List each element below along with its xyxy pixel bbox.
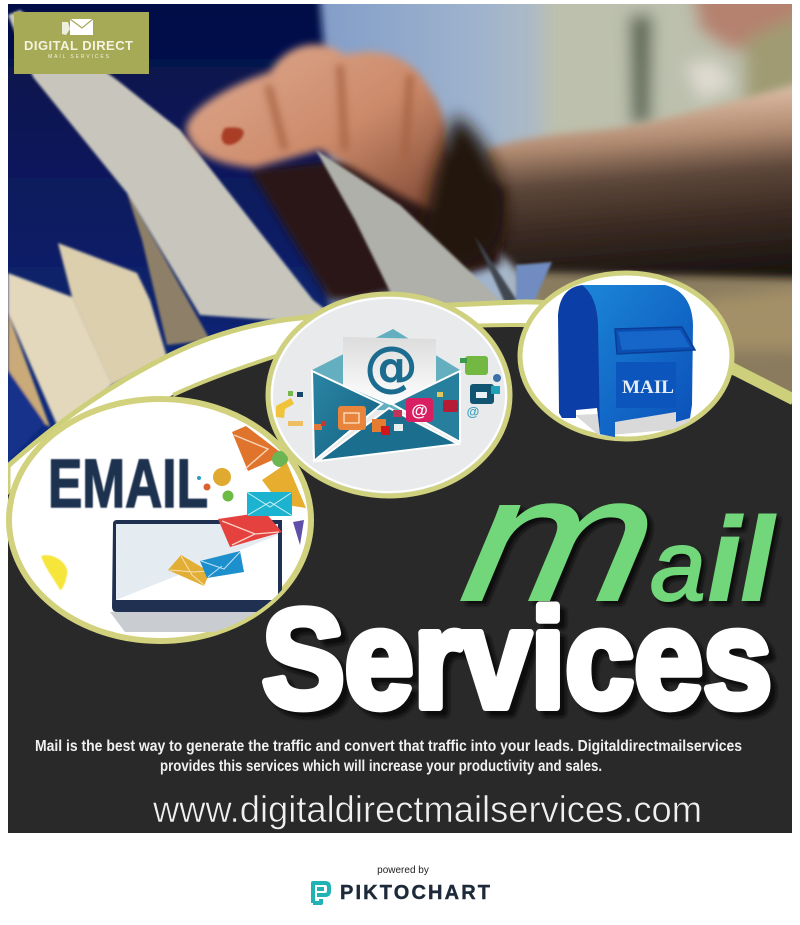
decorative dots [197,468,234,502]
website URL: www.digitaldirectmailservices.com [152,789,702,830]
Mail drop shadow: a [654,514,710,626]
mailbox side [558,285,615,437]
door panel [616,362,676,408]
laptop [110,520,282,632]
circle: blue mailbox [520,273,732,439]
logo tagline: MAIL SERVICES [48,54,110,60]
light bulb [41,555,67,590]
Mail drop shadow [456,443,780,642]
circle: envelope with @ [268,294,510,496]
description text [35,738,742,775]
description text: provides this services which will increase your productivity and sales. [160,758,602,775]
Mail lettering: il [708,494,776,626]
left small icons [276,391,326,430]
@ sign: @ [364,335,418,398]
logo envelope icon [62,19,93,35]
MAIL label: MAIL [622,377,674,398]
orange mail tile [338,406,366,430]
pink @ tile: @ [411,401,428,420]
envelope back flap [312,329,460,410]
mail slot flap [615,327,695,354]
Mail lettering [451,439,776,638]
circle: envelope with @: @ [467,404,479,419]
EMAIL word: EMAIL [48,445,208,522]
flying envelopes [168,426,306,586]
mailbox front [582,285,693,437]
title: Mail [451,439,780,642]
big sheet of paper [8,10,345,462]
Piktochart icon [313,883,329,903]
logo badge [14,12,149,74]
powered by footer [313,865,490,904]
letter sheet [343,337,436,405]
Mail drop shadow: m [456,443,677,642]
pink @ tile [406,398,433,422]
Mail lettering: m [451,439,672,638]
hand and forearm [186,44,800,350]
circle: email laptop [9,399,311,641]
Mail lettering: a [650,510,706,622]
swoosh band [8,299,792,495]
dark panel [8,325,792,833]
logo wordmark: DIGITAL DIRECT [24,38,133,53]
powered by footer: powered by [377,865,429,876]
Piktochart wordmark: PIKTOCHART [340,882,490,904]
second sheet of paper [316,150,552,312]
envelope front [312,371,382,461]
thumbs-up tile [470,384,500,404]
green phone tile [465,356,488,375]
Mail drop shadow: il [712,498,780,630]
